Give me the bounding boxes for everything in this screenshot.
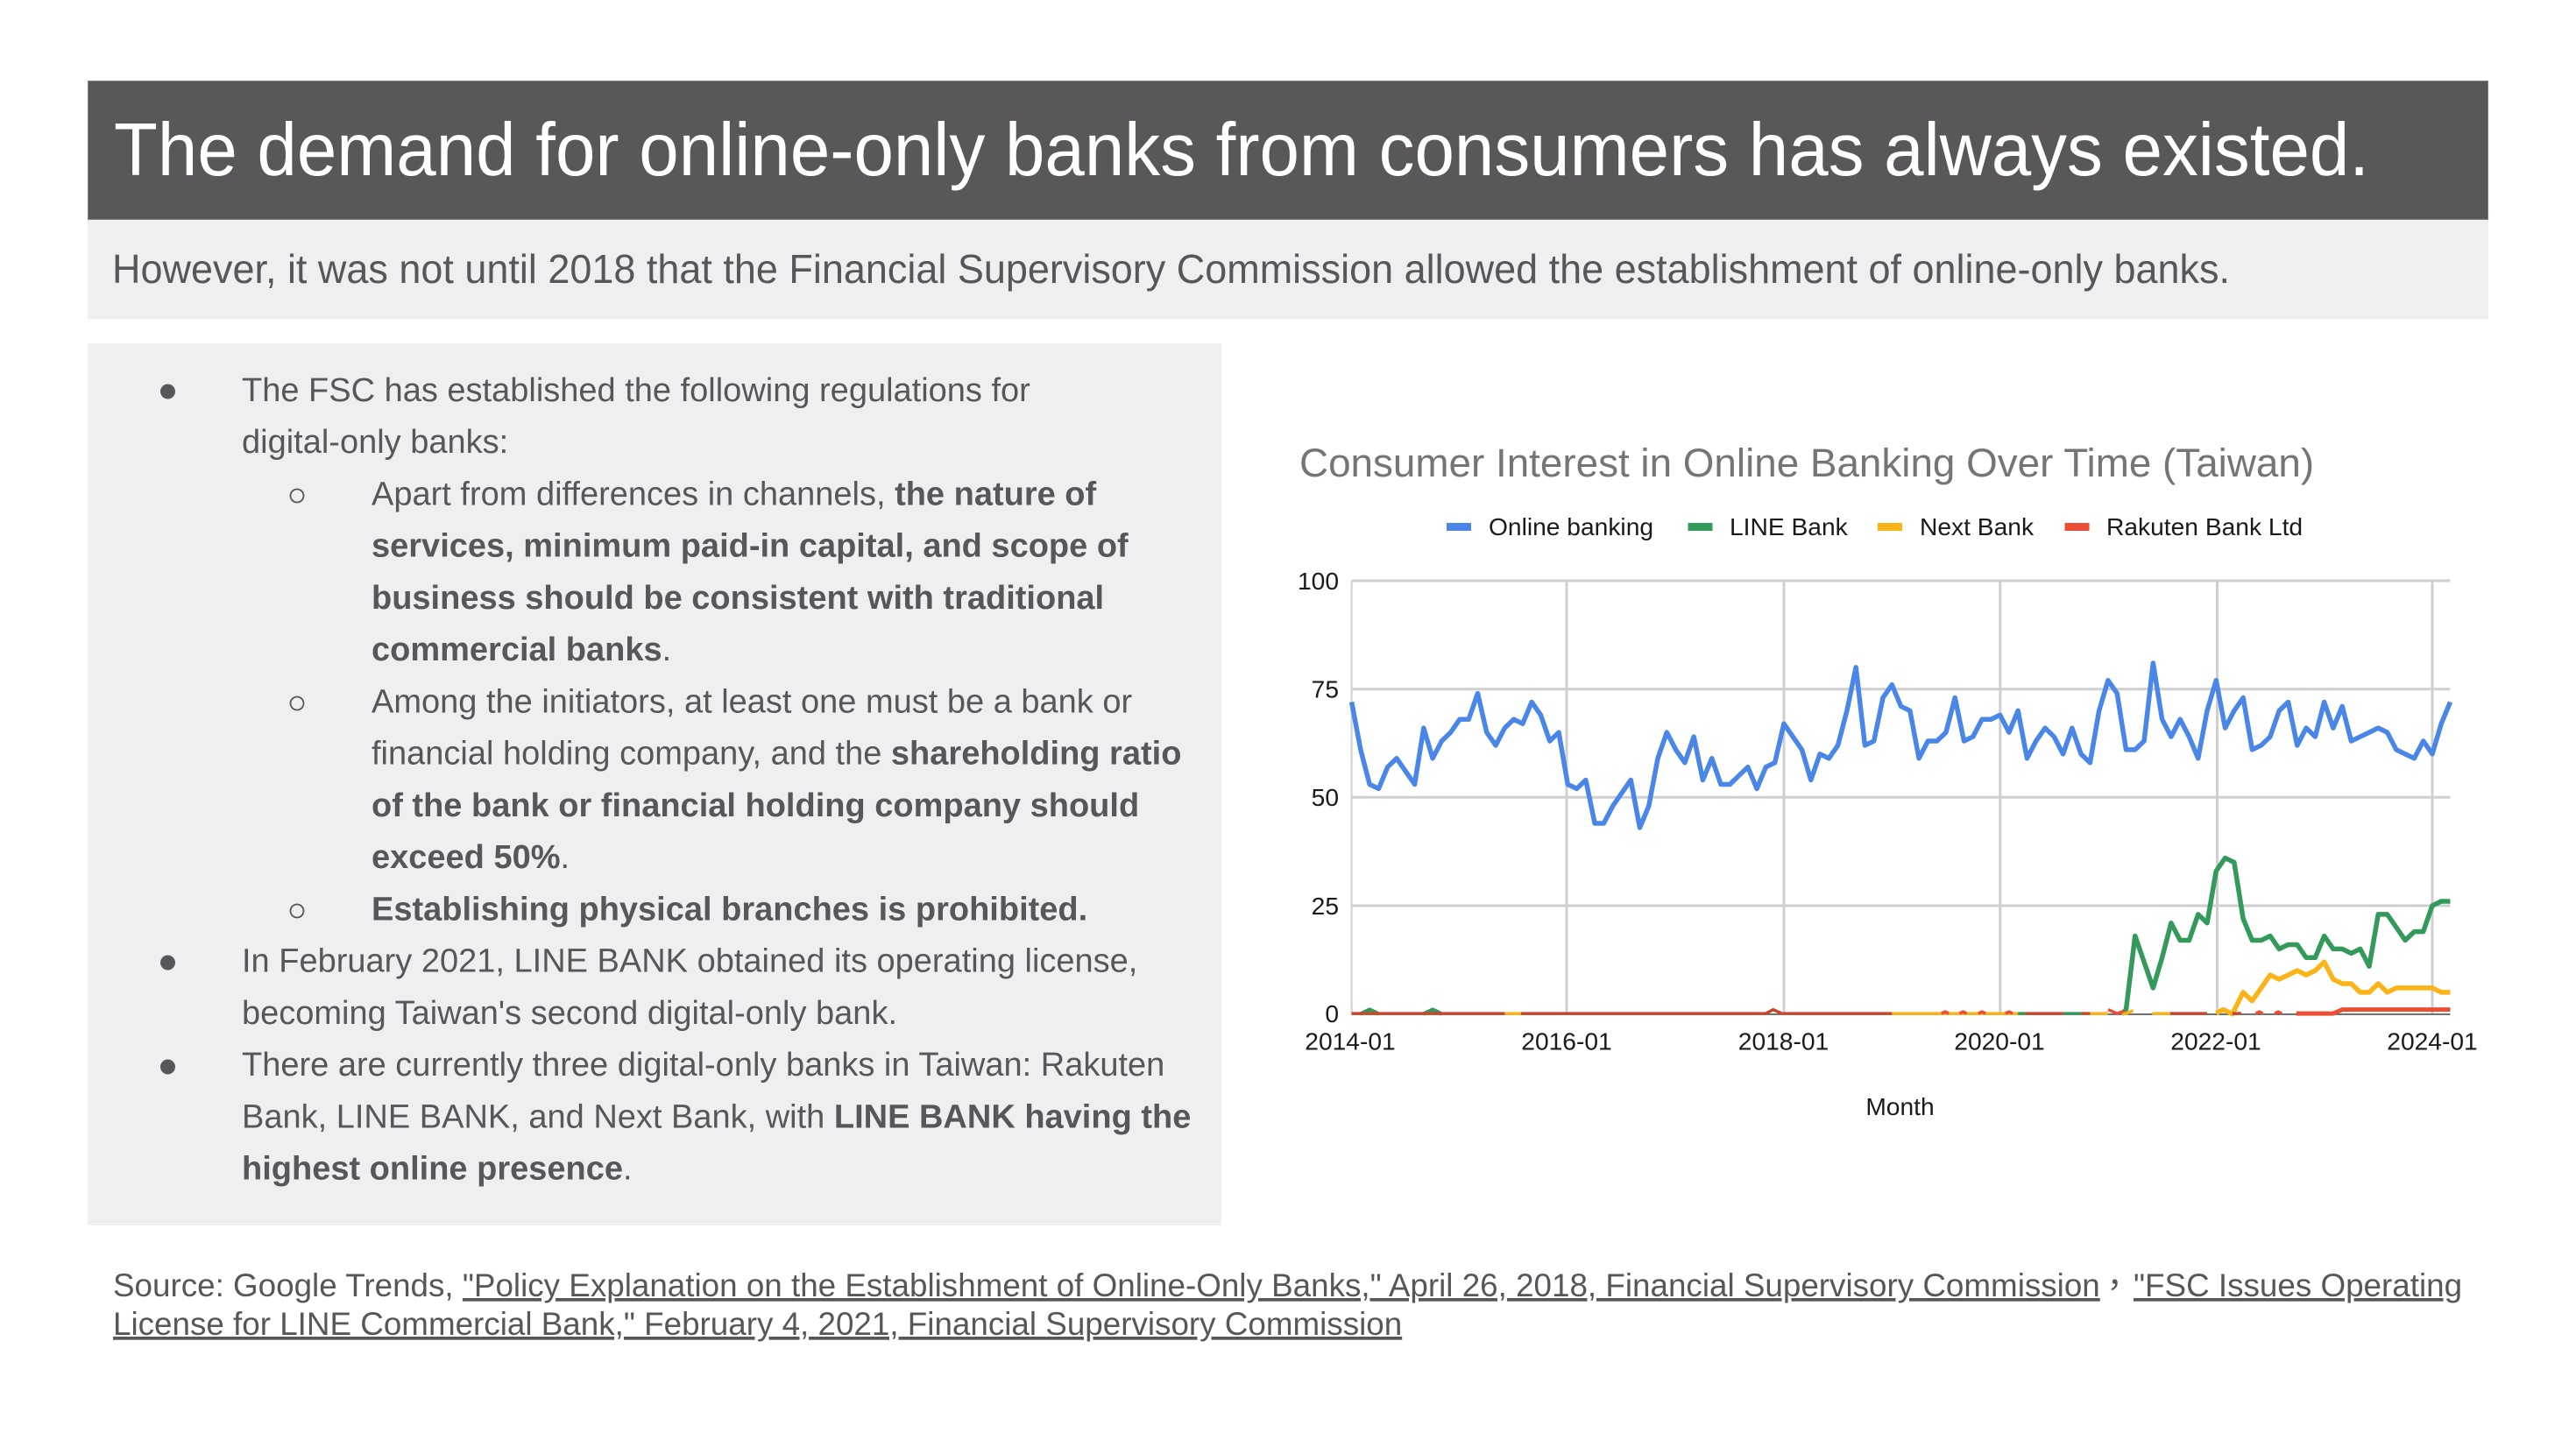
bullet: three digital-only banks: highest online presence. — [242, 1151, 633, 1188]
source note: ， — [2098, 1267, 2131, 1303]
bullet: LINE BANK license: In February 2021, LINE BANK obtained its operating license, — [242, 943, 1137, 980]
source note: Source: Google Trends, "Policy Explanation on the Establishment of Online-Only Banks," April 26, 2018, Financial Supervisory Commission — [113, 1267, 2100, 1303]
sub-bullet: nature of services: commercial banks. — [372, 632, 671, 668]
bullet: three digital-only banks: There are currently three digital-only banks in Taiwan: Rakuten — [242, 1047, 1164, 1083]
bullet: three digital-only banks — [160, 1047, 1191, 1188]
x axis labels: 2014-01 — [1305, 1027, 1396, 1055]
source note: "FSC Issues Operating — [2134, 1267, 2462, 1303]
legend: Rakuten Bank Ltd — [2106, 512, 2303, 540]
x axis labels: 2024-01 — [2387, 1027, 2478, 1055]
sub-bullet: nature of services — [291, 476, 1129, 668]
sub-bullet: physical branches: Establishing physical branches is prohibited. — [372, 892, 1087, 928]
series: LINE Bank — [2121, 858, 2451, 1014]
source note: License for LINE Commercial Bank," February 4, 2021, Financial Supervisory Commission — [113, 1306, 1402, 1342]
bullet: LINE BANK license — [160, 943, 1137, 1032]
y axis labels: 100 — [1298, 567, 1339, 595]
x axis labels: 2020-01 — [1954, 1027, 2045, 1055]
subtitle bar: However, it was not until 2018 that the Financial Supervisory Commission allowed the establishment of online-only banks. — [112, 246, 2230, 292]
sub-bullet: nature of services: services, minimum paid-in capital, and scope of — [372, 528, 1129, 565]
bullet: FSC regulations: digital-only banks: — [242, 424, 508, 461]
y axis labels: 50 — [1312, 783, 1339, 811]
bullet: FSC regulations — [160, 372, 1030, 461]
x axis labels: 2022-01 — [2170, 1027, 2261, 1055]
subtitle bar — [88, 220, 2488, 319]
x axis labels: 2018-01 — [1738, 1027, 1829, 1055]
legend — [1447, 512, 2303, 540]
x axis labels: 2016-01 — [1521, 1027, 1612, 1055]
sub-bullet: shareholding ratio: Among the initiators, at least one must be a bank or — [372, 683, 1133, 720]
bullet: LINE BANK license: becoming Taiwan's second digital-only bank. — [242, 995, 897, 1032]
sub-bullet: shareholding ratio: financial holding company, and the shareholding ratio — [372, 736, 1181, 773]
bullet: FSC regulations: The FSC has established the following regulations for — [242, 372, 1030, 409]
legend: Next Bank — [1920, 512, 2035, 540]
source note — [113, 1267, 2462, 1342]
panel: FSC regulations text — [88, 343, 1221, 1225]
sub-bullet: shareholding ratio: exceed 50%. — [372, 839, 570, 876]
line series — [1352, 663, 2451, 1014]
sub-bullet: nature of services: Apart from differences in channels, the nature of — [372, 476, 1097, 513]
sub-bullet: shareholding ratio: of the bank or financial holding company should — [372, 787, 1139, 824]
title bar — [88, 81, 2488, 219]
bullet: three digital-only banks: Bank, LINE BANK, and Next Bank, with LINE BANK having the — [242, 1098, 1191, 1135]
y axis labels: 0 — [1325, 999, 1339, 1027]
y axis labels: 25 — [1312, 892, 1339, 920]
chart title: Consumer Interest in Online Banking Over Time (Taiwan) — [1299, 441, 2314, 485]
legend: Online banking — [1489, 512, 1653, 540]
grid — [1352, 581, 2450, 1014]
y axis labels: 75 — [1312, 674, 1339, 702]
series: Rakuten Bank Ltd — [1352, 1012, 1504, 1015]
sub-bullet: nature of services: business should be consistent with traditional — [372, 580, 1104, 617]
legend: LINE Bank — [1730, 512, 1849, 540]
series: Next Bank — [2216, 962, 2451, 1014]
x axis labels — [1305, 1027, 2478, 1120]
chart: consumer interest over time — [1298, 441, 2478, 1120]
x axis labels: Month — [1865, 1092, 1935, 1120]
y axis labels — [1298, 567, 1339, 1027]
sub-bullet: shareholding ratio — [291, 683, 1181, 876]
title bar: The demand for online-only banks from consumers has always existed. — [114, 109, 2369, 192]
series: Online banking — [1352, 663, 2451, 828]
